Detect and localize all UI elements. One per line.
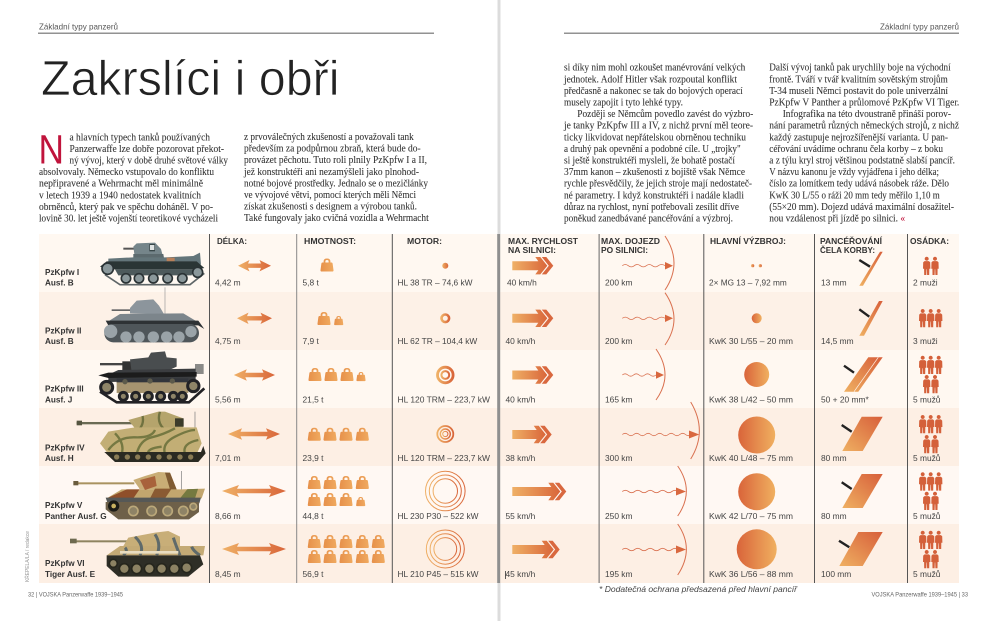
values: 100 mm <box>821 569 851 579</box>
speed arrow <box>512 310 553 327</box>
armour plate <box>844 357 883 392</box>
text column 3: si ještě konstruktéři mysleli, že bohatě postačí <box>564 156 735 166</box>
values: 40 km/h <box>506 336 536 346</box>
column headings: DÉLKA: <box>217 237 247 246</box>
values: 50 + 20 mm* <box>821 394 869 404</box>
values <box>215 569 941 579</box>
drop cap: N <box>38 127 64 173</box>
column headings: HLAVNÍ VÝZBROJ: <box>710 237 786 246</box>
crew <box>919 472 942 510</box>
tank name: PzKpfw II <box>45 326 81 336</box>
armour plate <box>859 301 883 336</box>
speed arrow <box>512 541 560 558</box>
text column 4: nou vzdálenost při jízdě po silnici. « <box>769 214 905 224</box>
values: 200 km <box>605 278 632 288</box>
column headings: PO SILNICI: <box>601 246 648 255</box>
page spine <box>498 0 500 621</box>
column headings: OSÁDKA: <box>910 237 949 246</box>
column headings <box>217 237 949 255</box>
speed arrow <box>512 483 566 500</box>
text column 2 <box>243 132 429 224</box>
tank illustration: PzKpfw VI <box>70 531 205 577</box>
text column 3: rychle přesvědčily, že jejich stroje mají nedostateč- <box>564 179 752 190</box>
values: HL 38 TR – 74,6 kW <box>398 278 473 288</box>
length arrow <box>237 313 272 324</box>
values: HL 62 TR – 104,4 kW <box>398 336 477 346</box>
length arrow <box>238 260 271 271</box>
text column 3: důraz na rychlost, nyní potřebovali zesílit dříve <box>564 202 740 213</box>
range arrow <box>622 236 674 290</box>
values: 5 mužů <box>913 569 941 579</box>
values: 80 mm <box>821 511 847 521</box>
tank name: Panther Ausf. G <box>45 512 107 521</box>
column headings: HMOTNOST: <box>304 237 356 246</box>
column headings: PANCÉŘOVÁNÍ <box>820 237 883 246</box>
engine icon <box>442 314 449 322</box>
tank name <box>45 326 81 346</box>
weight icons <box>308 428 369 441</box>
values: 5,56 m <box>215 394 241 404</box>
values: 14,5 mm <box>821 336 854 346</box>
column headings: MAX. RYCHLOST <box>508 237 578 246</box>
tank name: Ausf. J <box>45 396 72 404</box>
tank illustration: PzKpfw IV <box>77 412 206 462</box>
text column 2: především za podpůrnou zbraň, která bude do- <box>244 144 421 155</box>
text column 3: jednotek. Adolf Hitler však rozpoutal konflikt <box>563 74 737 85</box>
values: 200 km <box>605 336 632 346</box>
range arrow <box>622 293 674 345</box>
tank name <box>45 559 96 579</box>
header: left page: Základní typy panzerů <box>39 22 118 32</box>
text column 3: si díky nim mohl ozkoušet manévrování velkých <box>564 63 745 74</box>
values: 5 mužů <box>913 511 941 521</box>
gun calibre <box>751 264 762 267</box>
weight icons <box>317 312 343 325</box>
tank illustration: PzKpfw III <box>98 351 204 402</box>
tank name: PzKpfw III <box>45 384 84 394</box>
values <box>215 511 941 521</box>
crew <box>919 531 942 568</box>
text column 4: nání parametrů různých německých strojů, z nichž <box>769 121 960 132</box>
tank illustration: PzKpfw I <box>100 243 204 285</box>
column headings: ČELA KORBY: <box>820 246 875 255</box>
text column 4: Infografika na této dvoustraně přináší porov- <box>783 109 951 120</box>
armour plate <box>839 532 883 566</box>
crew <box>919 415 942 453</box>
text column 3: 37mm kanon – zkušenosti z bojiště však Němce <box>564 167 746 178</box>
column headings: NA SILNICI: <box>508 246 556 255</box>
values: 3 muži <box>913 336 938 346</box>
text column 4: každý zastupuje nejrozšířenější varianta. U pan- <box>769 132 948 143</box>
text column 4: a z týlu kryl stroj většinou podstatně slabší pancíř. <box>769 156 955 166</box>
text column 4: céřování uvádíme ochranu čela korby – z boku <box>769 144 943 155</box>
values: 7,01 m <box>215 453 241 463</box>
values: 8,45 m <box>215 569 241 579</box>
weight icons <box>320 258 334 272</box>
values <box>215 336 938 346</box>
speed arrow <box>512 426 552 443</box>
values: 40 km/h <box>506 394 536 404</box>
footer: left page: 32 | VOJSKA Panzerwaffe 1939–1945 <box>28 592 123 598</box>
text column 3: a druhý pak opevnění a podobné cíle. U „trojky" <box>564 144 741 155</box>
text column 4: (55×20 mm). Dojezd udává maximální dosažitel- <box>769 202 954 213</box>
text column 3: ticky likvidovat nepřátelskou obrněnou techniku <box>564 132 746 143</box>
values: 8,66 m <box>215 511 241 521</box>
tank name <box>45 443 85 463</box>
header: right page: Základní typy panzerů <box>880 22 959 32</box>
values: 4,75 m <box>215 336 241 346</box>
tank name <box>45 501 107 521</box>
values: 2 muži <box>913 278 938 288</box>
tank name: Ausf. B <box>45 337 74 346</box>
values: 300 km <box>605 453 632 463</box>
text column 2: Také fungovaly jako cvičná vozidla a Wehrmacht <box>244 213 429 224</box>
values: 165 km <box>605 394 632 404</box>
text column 4: V názvu kanonu je vždy vyjádřena i jeho délka; <box>769 167 939 178</box>
values: KwK 36 L/56 – 88 mm <box>709 569 793 579</box>
engine icon <box>426 471 465 511</box>
row: PzKpfw II <box>45 287 942 346</box>
weight icons <box>308 476 369 506</box>
values: KwK 38 L/42 – 50 mm <box>709 394 793 404</box>
text column 3: poněkud zanedbávané pancéřování a výzbroj. <box>564 214 733 224</box>
length arrow <box>234 369 275 381</box>
text column 2: jež konstruktéři ani nezamýšleli jako plnohod- <box>243 167 419 178</box>
crew <box>919 309 942 327</box>
tank name <box>45 384 84 404</box>
text column 1 <box>39 132 228 224</box>
text column 3: Později se Němcům povedlo zavést do výzbro- <box>577 109 753 120</box>
weight icons <box>308 368 366 381</box>
values: 7,9 t <box>302 336 319 346</box>
values: HL 210 P45 – 515 kW <box>398 569 479 579</box>
tank name: PzKpfw I <box>45 268 79 277</box>
tank name: PzKpfw V <box>45 501 83 510</box>
text column 3: předčasně a nakonec se tak do bojových operací <box>564 86 743 97</box>
row: PzKpfw V <box>45 466 942 521</box>
values: 38 km/h <box>506 453 536 463</box>
tank name: Ausf. B <box>45 278 74 288</box>
values: HL 120 TRM – 223,7 kW <box>398 453 490 463</box>
values: 5 mužů <box>913 453 941 463</box>
values: HL 230 P30 – 522 kW <box>398 511 479 521</box>
values: 4,42 m <box>215 278 241 288</box>
gun calibre <box>738 416 775 454</box>
text column 1: a hlavních typech tanků používaných <box>70 132 210 143</box>
text column 2: získat zkušenosti s designem a výrobou tanků. <box>244 202 417 213</box>
tank illustration: PzKpfw II <box>104 287 204 343</box>
length arrow <box>222 485 286 497</box>
values: 44,8 t <box>302 511 324 521</box>
text column 2: notné bojové prostředky. Jednalo se o mezičlánky <box>244 178 428 189</box>
range arrow <box>622 402 699 459</box>
table background rows <box>39 234 959 583</box>
text column 4: T-34 museli Němci postavit do pole univerzální <box>769 86 948 97</box>
gun calibre <box>737 529 777 569</box>
values: KwK 30 L/55 – 20 mm <box>709 336 793 346</box>
column headings: MOTOR: <box>407 237 442 246</box>
values: 21,5 t <box>302 394 324 404</box>
range arrow <box>622 349 665 400</box>
text column 3: né parametry. I když konstruktéři i nadále kladli <box>564 190 744 201</box>
tank name: Ausf. H <box>45 454 74 463</box>
values: 250 km <box>605 511 632 521</box>
values: KwK 40 L/48 – 75 mm <box>709 453 793 463</box>
text column 2: provázet pěchotu. Tuto roli plnily PzKpfw I a II, <box>244 155 427 166</box>
footer: right page: VOJSKA Panzerwaffe 1939–1945 | 33 <box>872 592 969 598</box>
engine icon <box>442 263 448 269</box>
values <box>215 394 941 404</box>
image credit: KŘEPELA/LA / redakce <box>23 531 31 582</box>
tank name <box>45 268 79 288</box>
row: PzKpfw III <box>45 349 942 404</box>
text column 1: nepřipravené a Wehrmacht měl minimálně <box>39 179 204 190</box>
text column 1: ný vývoj, který v době druhé světové války <box>70 156 228 166</box>
values: HL 120 TRM – 223,7 kW <box>398 394 490 404</box>
values: 5 mužů <box>913 394 941 404</box>
values <box>215 453 941 463</box>
engine icon <box>438 367 453 383</box>
armour plate <box>842 474 883 508</box>
values: 55 km/h <box>506 511 536 521</box>
speed arrow <box>512 366 553 384</box>
values: 56,9 t <box>302 569 324 579</box>
weight icons <box>308 535 385 563</box>
tank name: PzKpfw IV <box>45 443 85 452</box>
values: 45 km/h <box>506 569 536 579</box>
text column 3: musely zapojit i tyto lehké typy. <box>564 98 683 108</box>
text column 4 <box>769 63 960 224</box>
armour plate <box>842 417 883 451</box>
values: 40 km/h <box>507 278 537 288</box>
text column 2: z prvoválečných zkušeností a považovali tank <box>244 132 414 143</box>
text column 4: Další vývoj tanků pak urychlily boje na východní <box>769 63 951 74</box>
values: 2× MG 13 – 7,92 mm <box>709 278 787 288</box>
crew <box>919 356 942 393</box>
tank illustration: PzKpfw V <box>73 471 205 519</box>
length arrow <box>222 543 286 555</box>
row: PzKpfw I <box>45 236 939 290</box>
range arrow <box>622 466 686 516</box>
text column 1: lovině 30. let ještě vojenští teoretikové vycházeli <box>39 214 218 224</box>
text column 4: číslo za lomítkem tedy udává násobek ráže. Dělo <box>769 179 949 190</box>
length arrow <box>228 428 280 440</box>
text column 1: v letech 1939 a 1940 nedostatek kvalitních <box>39 190 201 201</box>
values: 80 mm <box>821 453 847 463</box>
text column 3 <box>563 63 753 224</box>
values: KwK 42 L/70 – 75 mm <box>709 511 793 521</box>
engine icon <box>437 426 453 442</box>
values: 195 km <box>605 569 632 579</box>
values: 13 mm <box>821 278 847 288</box>
range arrow <box>622 524 686 575</box>
text column 3: je tanky PzKpfw III a IV, z nichž první měl teore- <box>563 121 753 132</box>
text column 1: absolvovaly. Německo vstupovalo do konfliktu <box>39 167 214 178</box>
gun calibre <box>752 313 762 323</box>
gun calibre <box>738 473 775 510</box>
text column 1: obrněnců, který pak ve spěchu doháněl. V po- <box>39 202 213 213</box>
values: 5,8 t <box>302 278 319 288</box>
engine icon <box>426 530 464 568</box>
tank name: PzKpfw VI <box>45 559 85 568</box>
crew <box>923 257 939 275</box>
values: 23,9 t <box>302 453 324 463</box>
text column 4: frontě. Tváří v tvář kvalitním sovětským strojům <box>769 74 948 85</box>
text column 1: Panzerwaffe lze dobře pozorovat překot- <box>70 144 224 155</box>
text column 4: KwK 30 L/55 o ráži 20 mm tedy měřilo 1,10 m <box>769 190 940 201</box>
row: PzKpfw VI <box>45 524 942 579</box>
text column 4: PzKpfw V Panther a průlomové PzKpfw VI Tiger. <box>769 98 959 108</box>
values <box>215 278 938 288</box>
armour plate <box>859 252 883 286</box>
footnote: * Dodatečná ochrana předsazená před hlavní pancíř <box>599 584 798 594</box>
text column 2: ve vývojové větvi, pomocí kterých měli Němci <box>244 190 416 201</box>
speed arrow <box>512 257 553 274</box>
column headings: MAX. DOJEZD <box>601 237 660 246</box>
row: PzKpfw IV <box>45 402 942 463</box>
gun calibre <box>744 362 769 387</box>
tank name: Tiger Ausf. E <box>45 570 96 579</box>
title: Zakrslíci i obři <box>41 52 340 106</box>
